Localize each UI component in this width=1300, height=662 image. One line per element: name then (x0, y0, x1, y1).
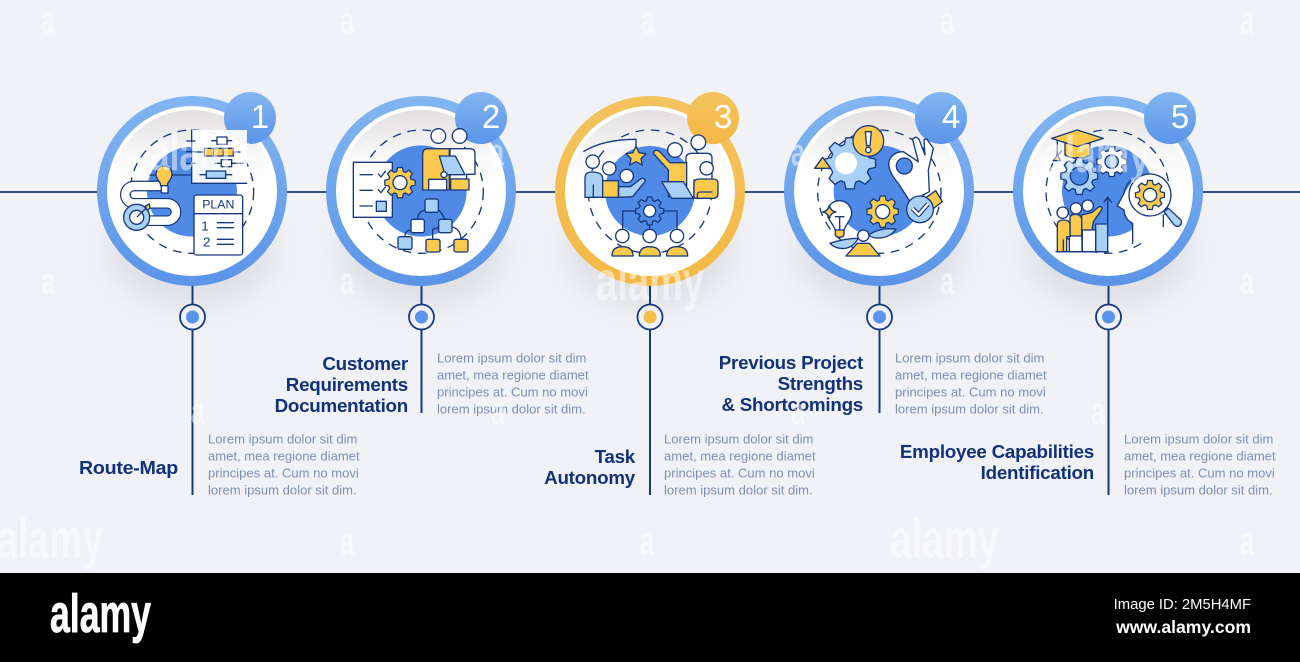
step 2 text: Lorem ipsum dolor sit dim (437, 350, 586, 366)
watermarks: a (641, 0, 656, 42)
step 5 connector (1024, 196, 1192, 495)
watermarks: alamy (150, 124, 250, 182)
watermarks: a (41, 0, 56, 42)
step 5 circle (1013, 96, 1203, 286)
watermarks: alamy (890, 507, 999, 570)
watermarks: a (41, 261, 56, 303)
watermarks: alamy (0, 507, 103, 570)
step 1: Route-Map (79, 92, 360, 498)
step 3 text: amet, mea regione diamet (664, 448, 816, 464)
watermarks: a (340, 261, 355, 303)
step 2 circle (326, 96, 516, 286)
step 1 connector (108, 196, 276, 495)
step 3: Task Autonomy (544, 92, 816, 498)
step 4 heading: Previous Project (719, 352, 864, 373)
step 2 text: amet, mea regione diamet (437, 368, 589, 382)
watermarks: a (340, 0, 355, 42)
step 2 connector (337, 196, 505, 413)
step 4 connector (795, 196, 963, 413)
step 5 badge: 5 (1171, 98, 1189, 135)
watermarks: a (940, 261, 955, 303)
step 2: Customer Requirements Documentation (275, 92, 589, 416)
step 1 text: principes at. Cum no movi (208, 466, 359, 480)
step 4 heading: & Shortcomings (721, 394, 863, 415)
step 5 text: lorem ipsum dolor sit dim. (1124, 482, 1273, 498)
step 2 heading: Requirements (286, 374, 408, 395)
step 2 badge (455, 92, 507, 144)
step 1 text: Lorem ipsum dolor sit dim (208, 432, 357, 446)
step 3 connector (566, 196, 734, 495)
step 4 circle (784, 96, 974, 286)
step 4: Previous Project Strengths & Shortcomings (719, 92, 1047, 416)
step 2 text: principes at. Cum no movi (437, 384, 588, 400)
website: www.alamy.com (1115, 617, 1251, 637)
watermarks: a (1240, 0, 1255, 42)
step 1 badge (224, 92, 276, 144)
step 3 text: Lorem ipsum dolor sit dim (664, 432, 813, 446)
step 4 text: lorem ipsum dolor sit dim. (895, 402, 1044, 416)
icon: requirements checklist and org chart (353, 129, 483, 253)
icon: plan and road map (124, 130, 254, 255)
watermarks: a (640, 521, 655, 563)
step 5 text: amet, mea regione diamet (1124, 448, 1276, 464)
step 3 badge (687, 92, 739, 144)
step 3 badge: 3 (714, 98, 732, 135)
step 3 text: principes at. Cum no movi (664, 466, 815, 480)
icon: strengths and shortcomings (815, 126, 942, 256)
watermarks: a (791, 132, 806, 174)
step 5 badge (1144, 92, 1196, 144)
watermarks: a (940, 0, 955, 42)
icon: team autonomy (583, 130, 718, 256)
step 4 heading: Strengths (778, 373, 863, 394)
step 1 text: lorem ipsum dolor sit dim. (208, 482, 357, 498)
horizontal timeline (0, 191, 1300, 193)
step 1 heading: Route-Map (79, 457, 178, 478)
step 1 circle (97, 96, 287, 286)
icon: plan and road map: 1 (201, 219, 209, 234)
step 2 heading: Customer (322, 353, 409, 374)
icon: capabilities identification (1046, 130, 1182, 253)
step 5 text: Lorem ipsum dolor sit dim (1124, 432, 1273, 446)
watermarks: alamy (1044, 126, 1150, 184)
step 1 badge: 1 (251, 98, 269, 135)
watermarks: a (791, 391, 806, 433)
footer logo: alamy (50, 584, 151, 644)
step 2 heading: Documentation (275, 395, 408, 416)
image id: Image ID: 2M5H4MF (1114, 597, 1251, 613)
step 4 text: principes at. Cum no movi (895, 384, 1046, 400)
step 4 badge: 4 (942, 98, 960, 135)
step 5 heading: Identification (981, 462, 1094, 483)
step 5: Employee Capabilities Identification (900, 92, 1276, 498)
step 5 text: principes at. Cum no movi (1124, 466, 1275, 480)
step 1 text: amet, mea regione diamet (208, 448, 360, 464)
step 3 circle (555, 96, 745, 286)
step 5 heading: Employee Capabilities (900, 441, 1094, 462)
step 4 text: Lorem ipsum dolor sit dim (895, 350, 1044, 366)
watermarks: a (1240, 261, 1255, 303)
watermarks: a (340, 521, 355, 563)
step 3 heading: Autonomy (544, 467, 636, 488)
watermarks: a (1091, 391, 1106, 433)
watermarks: a (491, 391, 506, 433)
icon: plan and road map: 2 (203, 235, 210, 250)
step 3 text: lorem ipsum dolor sit dim. (664, 482, 813, 498)
step 4 text: amet, mea regione diamet (895, 368, 1047, 382)
step 4 badge (915, 92, 967, 144)
step 2 text: lorem ipsum dolor sit dim. (437, 402, 586, 416)
footer bar (0, 573, 1300, 662)
step 2 badge: 2 (482, 98, 500, 135)
watermarks: a (191, 391, 206, 433)
watermarks: a (1240, 521, 1255, 563)
watermarks: a (490, 132, 505, 174)
watermarks: alamy (596, 249, 704, 312)
step 3 heading: Task (595, 446, 636, 467)
icon: plan and road map: PLAN (202, 198, 234, 212)
